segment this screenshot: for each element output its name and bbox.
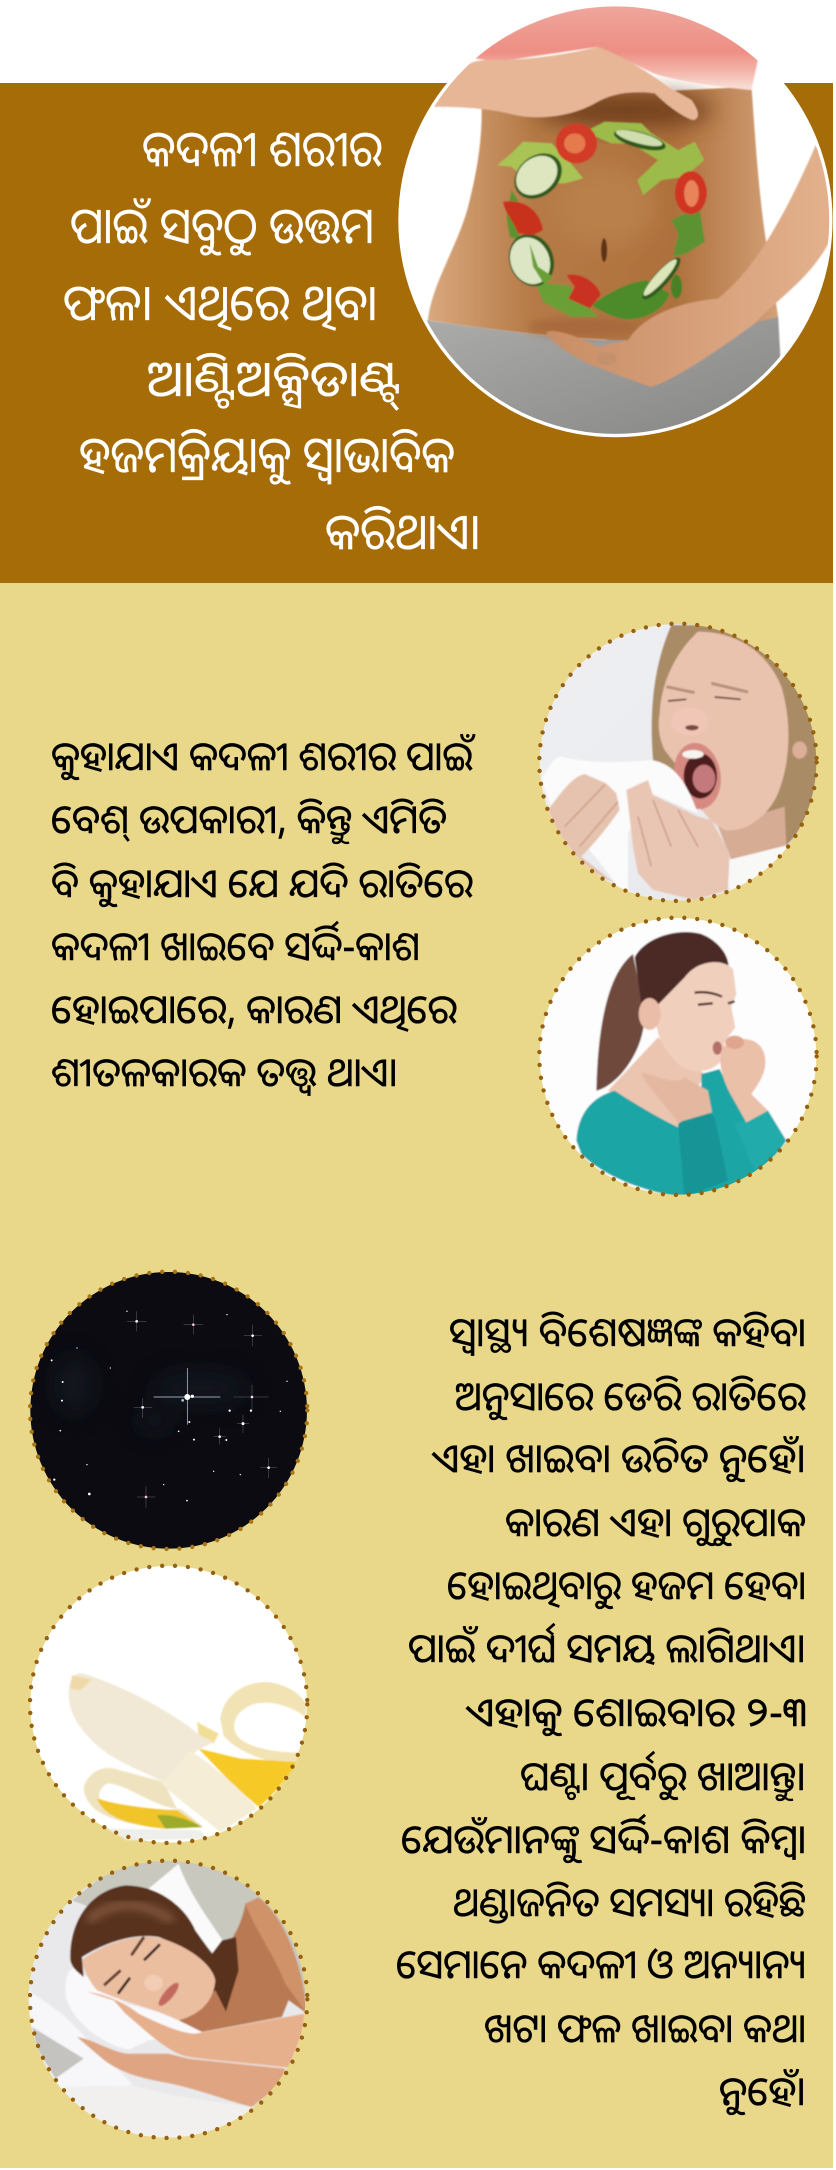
text block: health experts advice: କାରଣ ଏହା ଗୁରୁପାକ xyxy=(505,1493,806,1548)
grey trousers xyxy=(426,317,785,440)
text block: health experts advice: ସ୍ୱାସ୍ଥ୍ୟ ବିଶେଷଜ୍ଞଙ୍କ କହିବା xyxy=(449,1303,806,1358)
text block: night banana warning xyxy=(51,727,475,1098)
text block: health experts advice: ଖଟା ଫଳ ଖାଇବା କଥା xyxy=(484,1999,806,2054)
open mouth xyxy=(673,742,722,810)
text block: night banana warning: ଶୀତଳକାରକ ତତ୍ତ୍ୱ ଥାଏ। xyxy=(51,1043,398,1098)
brows and closed eyes xyxy=(104,1937,144,1985)
head hair xyxy=(635,932,729,1014)
lower hand and forearm xyxy=(546,143,833,387)
teal shirt xyxy=(576,1069,786,1197)
brown header band xyxy=(0,83,833,583)
text block: health experts advice: ସେମାନେ କଦଳୀ ଓ ଅନ୍ୟାନ୍ୟ xyxy=(396,1935,806,1990)
neck xyxy=(718,807,786,860)
upper pillow xyxy=(149,1864,225,1955)
upper hand xyxy=(433,47,698,120)
text block: night banana warning: କଦଳୀ ଖାଇବେ ସର୍ଦ୍ଦି-କାଶ xyxy=(51,917,420,972)
title text: ଆଣ୍ଟିଅକ୍ସିଡାଣ୍ଟ୍ xyxy=(147,343,401,411)
banana peel base xyxy=(197,1722,219,1744)
text block: health experts advice: ଘଣ୍ଟା ପୂର୍ବରୁ ଖାଆନ୍ତୁ। xyxy=(520,1747,806,1802)
left peel xyxy=(84,1768,204,1829)
text block: night banana warning: କୁହାଯାଏ କଦଳୀ ଶରୀର ପାଇଁ xyxy=(51,727,475,782)
title text: କରିଥାଏ। xyxy=(325,496,481,564)
text block: night banana warning: ବି କୁହାଯାଏ ଯେ ଯଦି ରାତିରେ xyxy=(51,854,473,909)
text block: health experts advice: ଥଣ୍ଡାଜନିତ ସମସ୍ୟା ରହିଛି xyxy=(453,1873,806,1928)
title text: ପାଇଁ ସବୁଠୁ ଉତ୍ତମ xyxy=(70,190,374,258)
right curled peel xyxy=(220,1682,307,1766)
tissue xyxy=(541,757,698,900)
left hand xyxy=(548,774,620,883)
photo: starry night sky xyxy=(30,1272,307,1549)
yellow inner peel xyxy=(199,1749,297,1807)
text block: night banana warning: ହୋଇପାରେ, କାରଣ ଏଥିରେ xyxy=(51,980,457,1035)
navel xyxy=(601,238,607,262)
pink top garment xyxy=(475,4,758,90)
title text: ହଜମକ୍ରିୟାକୁ ସ୍ୱାଭାବିକ xyxy=(79,419,455,487)
hair xyxy=(652,625,818,847)
text block: health experts advice: ହୋଇଥିବାରୁ ହଜମ ହେବା xyxy=(447,1556,806,1611)
ear xyxy=(639,998,661,1030)
text block: night banana warning: ବେଶ୍ ଉପକାରୀ, କିନ୍ତୁ ଏମିତି xyxy=(51,790,447,845)
text block: health experts advice: ଏହାକୁ ଶୋଇବାର ୨-୩ xyxy=(465,1683,806,1738)
title text xyxy=(63,113,481,564)
eyes and brow xyxy=(695,992,735,1005)
face xyxy=(656,962,736,1071)
yellow content background xyxy=(0,583,833,2168)
text block: health experts advice: ନୁହେଁ। xyxy=(719,2062,806,2117)
text block: health experts advice: ଯେଉଁମାନଙ୍କୁ ସର୍ଦ୍ଦି-କାଶ କିମ୍ବା xyxy=(401,1810,806,1865)
title text: ଫଳ। ଏଥିରେ ଥିବା xyxy=(63,267,377,335)
banana tongue peel xyxy=(162,1750,257,1832)
pillow under head xyxy=(65,1968,205,2050)
title text: କଦଳୀ ଶରୀର xyxy=(142,113,382,181)
closed eyes and brows xyxy=(668,697,741,701)
fist and wrist xyxy=(720,1039,768,1122)
bare back and shoulder xyxy=(202,1898,307,2032)
white shirt xyxy=(728,844,786,890)
text block: health experts advice: ଅନୁସାରେ ଡେରି ରାତିରେ xyxy=(455,1367,806,1422)
photo: woman sneezing into tissue xyxy=(538,620,822,904)
banana flesh xyxy=(69,1673,214,1782)
right hand xyxy=(626,780,730,900)
photo: woman sleeping xyxy=(25,1857,312,2144)
photo: peeled banana xyxy=(30,1566,307,1843)
text block: health experts advice: ଏହା ଖାଇବା ଉଚିତ ନୁହେଁ। xyxy=(431,1429,806,1484)
lips xyxy=(713,1041,722,1055)
neck and chest xyxy=(608,1037,705,1127)
face xyxy=(82,1937,215,2020)
face xyxy=(659,632,788,830)
faint nebula xyxy=(58,1362,237,1407)
lips xyxy=(156,1980,182,2009)
neck xyxy=(179,1990,227,2032)
ponytail xyxy=(596,954,645,1091)
lower arm xyxy=(77,2037,285,2107)
left sheets xyxy=(29,1990,132,2090)
upper arm and hand xyxy=(87,1992,305,2068)
photo: hands framing belly with salad ring xyxy=(399,3,833,440)
wall xyxy=(72,1857,312,2000)
rumpled grey fold xyxy=(32,2027,84,2079)
hand at throat xyxy=(641,1074,712,1122)
nose xyxy=(671,708,708,736)
hair xyxy=(70,1885,239,2014)
text block: health experts advice: ପାଇଁ ଦୀର୍ଘ ସମୟ ଲାଗିଥାଏ। xyxy=(408,1619,806,1674)
belly torso xyxy=(428,87,778,340)
bright star cluster xyxy=(51,1311,288,1508)
nose xyxy=(144,1975,163,1991)
bottom sheet xyxy=(59,2085,252,2144)
text block: health experts advice xyxy=(396,1303,806,2117)
photo: woman coughing xyxy=(538,914,822,1198)
salad ring xyxy=(497,122,707,319)
